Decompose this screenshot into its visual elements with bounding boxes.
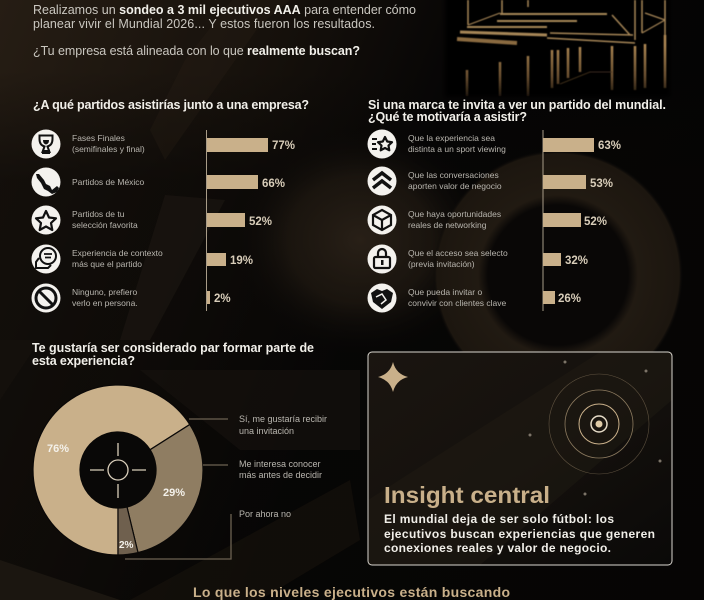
sparkle dots <box>528 360 662 496</box>
heading: motivación: ¿Qué te motivaría a asistir? <box>368 110 527 124</box>
row: ninguno: Ninguno, prefiero <box>72 287 137 297</box>
row: acceso: (previa invitación) <box>408 259 475 269</box>
footer heading: Lo que los niveles ejecutivos están buscando <box>193 584 510 600</box>
row: ninguno: verlo en persona. <box>72 298 138 308</box>
axis: motivación <box>542 130 544 311</box>
row: selección: selección favorita <box>72 220 138 230</box>
title: insight central: Insight central <box>384 482 550 508</box>
donut labels <box>239 414 327 519</box>
row: ninguno: 2% <box>214 293 231 305</box>
panel: partidos <box>32 130 295 312</box>
image: golden wireframe stairs <box>445 0 670 97</box>
row: invitar <box>368 284 581 312</box>
row: acceso: 32% <box>565 255 588 267</box>
row: invitar: Que pueda invitar o <box>408 287 482 297</box>
row: experiencia <box>368 130 621 158</box>
icon: star <box>378 362 408 392</box>
row: invitar: 26% <box>558 293 581 305</box>
heading: motivación: Si una marca te invita a ver un partido del mundial. <box>368 98 666 112</box>
row: oportunidades: Que haya oportunidades <box>408 209 501 219</box>
row: networking: aporten valor de negocio <box>408 181 502 191</box>
body: insight central <box>384 512 655 555</box>
intro text: Realizamos un sondeo a 3 mil ejecutivos AAA para entender cómo <box>33 3 416 17</box>
donut values: 76% <box>47 443 69 455</box>
intro text: ¿Tu empresa está alineada con lo que realmente buscan? <box>33 44 360 58</box>
donut center <box>80 432 156 508</box>
donut labels: Sí, me gustaría recibir <box>239 414 327 424</box>
body: insight central: ejecutivos buscan experiencias que generen <box>384 527 655 541</box>
heading: donut <box>32 341 314 368</box>
row: invitar: convivir con clientes clave <box>408 298 507 308</box>
row: oportunidades: reales de networking <box>408 220 487 230</box>
row: contexto: 19% <box>230 255 253 267</box>
row: networking <box>368 166 613 196</box>
donut values: 2% <box>119 540 134 551</box>
heading: partidos: ¿A qué partidos asistirías junto a una empresa? <box>33 98 309 112</box>
row: fases finales <box>32 130 295 158</box>
row: acceso <box>368 244 588 274</box>
row: experiencia: 63% <box>598 140 621 152</box>
body: insight central: El mundial deja de ser solo fútbol: los <box>384 512 614 526</box>
row: partidos de México <box>32 168 285 196</box>
intro text <box>33 3 416 58</box>
intro text: planear vivir el Mundial 2026... Y estos fueron los resultados. <box>33 17 375 31</box>
donut leaders <box>125 419 231 559</box>
row: experiencia: Que la experiencia sea <box>408 133 495 143</box>
donut values: 29% <box>163 487 185 499</box>
donut labels: una invitación <box>239 426 294 436</box>
body: insight central: conexiones reales y valor de negocio. <box>384 541 611 555</box>
row: experiencia: distinta a un sport viewing <box>408 144 506 154</box>
donut values <box>47 443 185 551</box>
row: fases finales: 77% <box>272 140 295 152</box>
row: selección: Partidos de tu <box>72 209 125 219</box>
donut labels: Por ahora no <box>239 509 291 519</box>
panel: motivación <box>368 130 621 312</box>
row: selección: 52% <box>249 216 272 228</box>
row: fases finales: Fases Finales <box>72 133 125 143</box>
row: partidos de México: 66% <box>262 178 285 190</box>
heading: motivación <box>368 98 666 124</box>
row: acceso: Que el acceso sea selecto <box>408 248 508 258</box>
row: contexto: Experiencia de contexto <box>72 248 163 258</box>
donut labels: Me interesa conocer <box>239 459 321 469</box>
row: fases finales: (semifinales y final) <box>72 144 145 154</box>
row: contexto <box>32 244 253 274</box>
row: oportunidades <box>368 206 607 234</box>
row: networking: Que las conversaciones <box>408 170 499 180</box>
panel: insight central <box>368 352 672 565</box>
heading: donut: esta experiencia? <box>32 354 135 368</box>
donut chart <box>33 385 203 555</box>
row: selección <box>32 206 272 234</box>
segment: por ahora no <box>118 507 138 555</box>
donut labels: más antes de decidir <box>239 470 322 480</box>
heading: donut: Te gustaría ser considerado par formar parte de <box>32 341 314 355</box>
row: oportunidades: 52% <box>584 216 607 228</box>
row: ninguno <box>32 284 231 312</box>
row: networking: 53% <box>590 178 613 190</box>
segment: sí <box>33 385 190 555</box>
segment: más antes <box>127 424 203 553</box>
icon: concentric target <box>549 374 649 474</box>
row: contexto: más que el partido <box>72 259 142 269</box>
axis: partidos <box>206 130 207 311</box>
row: partidos de México: Partidos de México <box>72 177 145 187</box>
